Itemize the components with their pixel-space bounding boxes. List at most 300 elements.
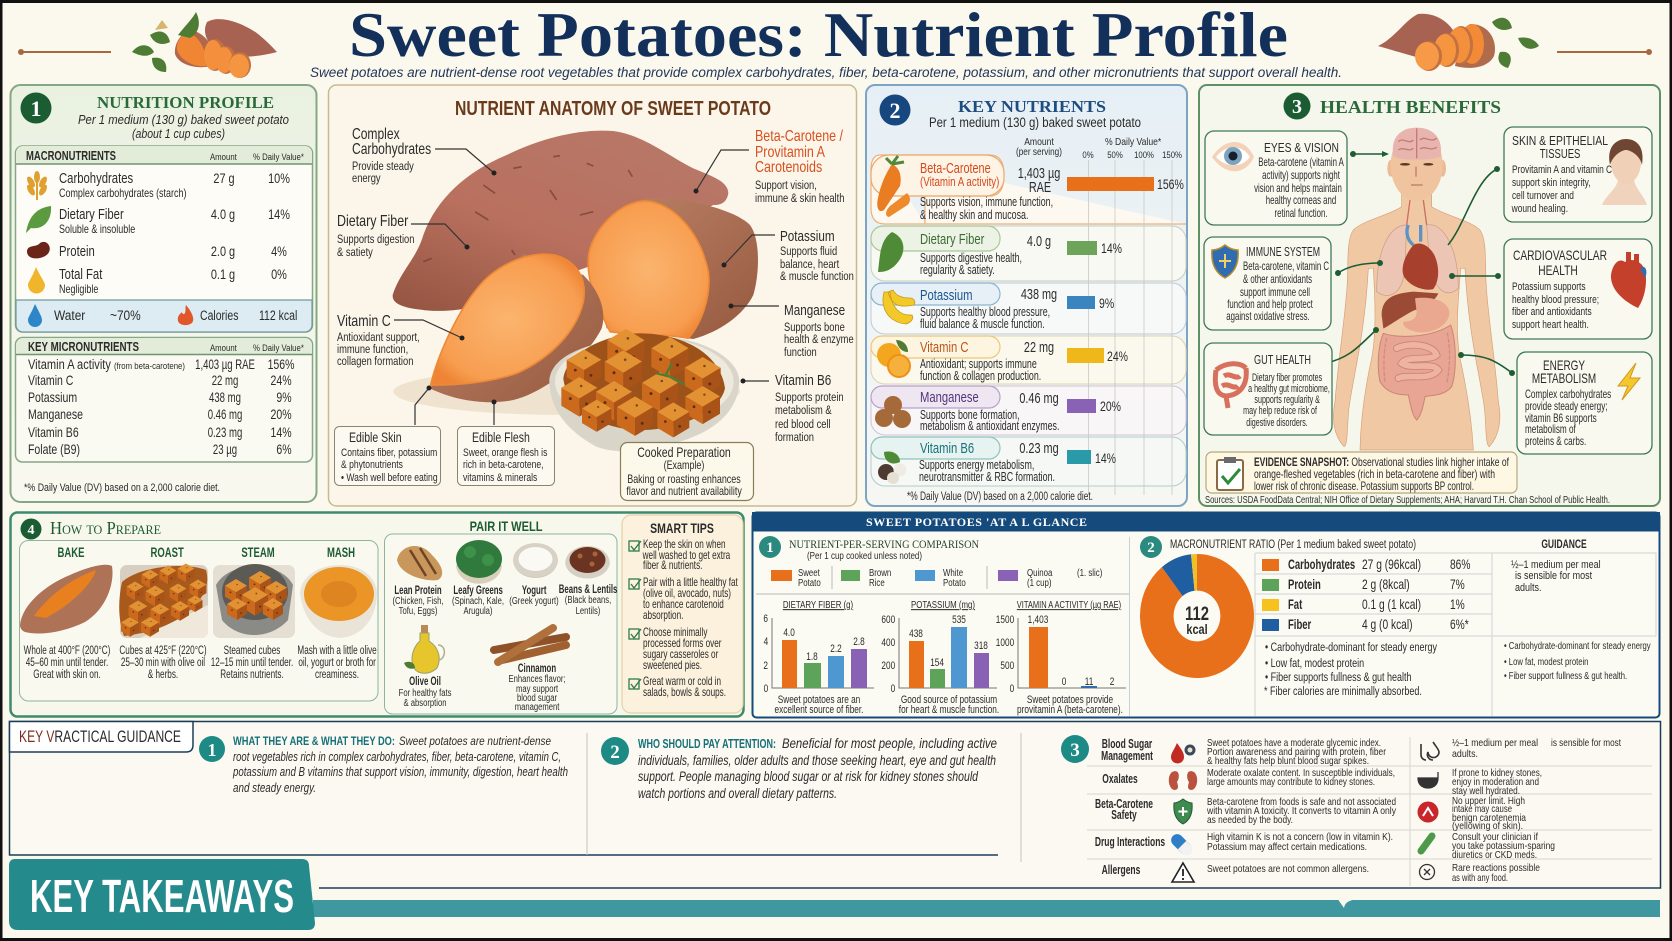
recommendations: you take potassium-sparing bbox=[1452, 840, 1555, 852]
method: steam: STEAM bbox=[241, 544, 275, 561]
callout: vitamin B6: Supports protein bbox=[775, 391, 844, 404]
macronutrient table: 1% bbox=[1450, 596, 1465, 612]
callout: complex carbohydrates bbox=[352, 125, 431, 185]
pair it well: (Spinach, Kale, bbox=[452, 595, 504, 606]
pair it well: blood sugar bbox=[517, 692, 557, 703]
panel: at a glance bbox=[752, 512, 1660, 718]
row: vitamin C bbox=[871, 336, 1186, 384]
callout: edible flesh: Sweet, orange flesh is bbox=[463, 447, 547, 459]
row: vitamin C: function & collagen production. bbox=[920, 370, 1041, 383]
row: dietary fiber: Dietary Fiber bbox=[920, 230, 985, 247]
badge 3 bbox=[1061, 735, 1089, 763]
subtitle: Sweet potatoes are nutrient-dense root vegetables that provide complex carbohydrates, fiber, beta-carotene, potassium, and other micronutrients that support overall health. bbox=[310, 65, 1342, 80]
guidance column: GUIDANCE bbox=[1541, 539, 1587, 551]
bowl of roasted cubes bbox=[549, 329, 739, 451]
callout: complex carbohydrates: Carbohydrates bbox=[352, 140, 431, 157]
chart legend: Potato bbox=[943, 577, 966, 588]
icon: nuts bbox=[875, 396, 911, 428]
icon: olive oil bbox=[404, 625, 444, 673]
row: vitamin C: 22 mg bbox=[1024, 338, 1054, 355]
card: eyes and vision: activity) supports night bbox=[1262, 170, 1340, 183]
who should pay attention: support. People managing blood sugar or at risk for kidney stones should bbox=[638, 769, 978, 784]
macronutrients table: MACRONUTRIENTS bbox=[26, 148, 116, 163]
icon: flame bbox=[178, 305, 193, 325]
bar chart: potassium: 318 bbox=[974, 640, 988, 652]
tip checkboxes bbox=[629, 541, 641, 689]
evidence snapshot bbox=[1206, 452, 1517, 493]
macronutrients table bbox=[16, 146, 312, 332]
smart tips: SMART TIPS bbox=[650, 521, 714, 536]
total fat row bbox=[59, 266, 287, 296]
recommendations: adults. bbox=[1452, 748, 1478, 760]
who should pay attention: Beneficial for most people, including active bbox=[782, 736, 997, 751]
icon: cinnamon bbox=[494, 628, 566, 662]
pair it well: Lentils) bbox=[576, 605, 600, 616]
callout: vitamin B6: formation bbox=[775, 431, 814, 444]
bar chart: percent daily value: 156% bbox=[1157, 177, 1184, 192]
card: skin and epithelial tissues: Provitamin A and vitamin C bbox=[1512, 164, 1612, 176]
micronutrient rows: Potassium bbox=[28, 390, 77, 405]
badge 2: 2 bbox=[610, 742, 620, 763]
row: vitamin B6 bbox=[871, 437, 1186, 486]
card: eyes and vision: retinal function. bbox=[1274, 208, 1328, 221]
micronutrient rows: Vitamin C bbox=[28, 373, 74, 388]
dietary fiber row: Dietary Fiber bbox=[59, 206, 124, 222]
bar chart: potassium: 438 bbox=[909, 628, 923, 640]
column headers and axis: 100% bbox=[1134, 149, 1154, 160]
macronutrients table: % Daily Value* bbox=[253, 151, 304, 162]
what they are: potassium and B vitamins that support vision, immunity, digestion, heart health bbox=[232, 765, 568, 779]
callout: manganese: Manganese bbox=[784, 302, 845, 318]
micronutrient rows: 6% bbox=[276, 442, 292, 457]
row labels: Allergens bbox=[1102, 863, 1140, 878]
badge 1: 1 bbox=[208, 740, 216, 760]
smart tips: well washed to get extra bbox=[642, 550, 731, 562]
descriptions: Portion awareness and pairing with protein, fiber bbox=[1207, 746, 1386, 758]
badge 1 bbox=[759, 536, 781, 558]
descriptions bbox=[1206, 737, 1397, 875]
dietary fiber row: 4.0 g bbox=[211, 207, 235, 222]
micronutrient rows: 438 mg bbox=[209, 390, 241, 405]
row: vitamin B6: 0.23 mg bbox=[1019, 439, 1059, 456]
bar chart: vitamin A: 2 bbox=[1110, 676, 1114, 688]
footnote: *% Daily Value (DV) based on a 2,000 calorie diet. bbox=[907, 491, 1093, 503]
preparation methods bbox=[20, 540, 378, 701]
icon: food mix bbox=[878, 451, 906, 484]
icon: water bowl bbox=[1418, 772, 1438, 788]
total fat row: Total Fat bbox=[59, 266, 103, 282]
recommendations: No upper limit. High bbox=[1452, 795, 1525, 807]
icon: red badge bbox=[1418, 802, 1438, 822]
callout: dietary fiber: Supports digestion bbox=[337, 233, 414, 246]
macronutrient notes: • Carbohydrate-dominant for steady energy bbox=[1265, 641, 1438, 654]
icon: oil drop bbox=[28, 267, 45, 293]
icon: eye bbox=[1212, 142, 1254, 171]
callout: complex carbohydrates: Provide steady bbox=[352, 160, 414, 173]
macronutrient table: Carbohydrates bbox=[1288, 556, 1355, 573]
card: skin and epithelial tissues: support skin integrity, bbox=[1512, 177, 1591, 189]
smart tips: Pair with a little healthy fat bbox=[643, 577, 738, 589]
chart legend: Potato bbox=[798, 577, 821, 588]
what they are bbox=[199, 734, 568, 795]
callout: manganese: Supports bone bbox=[784, 321, 845, 334]
card: immune system: against oxidative stress. bbox=[1226, 311, 1310, 324]
callout: dietary fiber bbox=[337, 213, 414, 259]
smart tips: to enhance carotenoid bbox=[643, 599, 724, 611]
smart tips: fiber & nutrients. bbox=[643, 560, 702, 572]
bar chart: vitamin A: VITAMIN A ACTIVITY (µg RAE) bbox=[1017, 599, 1121, 610]
micronutrient rows: 156% bbox=[268, 357, 295, 372]
icon: face bbox=[1602, 139, 1647, 205]
micronutrients table: KEY MICRONUTRIENTS bbox=[28, 339, 139, 354]
bar chart: vitamin A: 1000 bbox=[996, 637, 1015, 649]
considerations table bbox=[1061, 735, 1652, 886]
row labels: Beta-Carotene bbox=[1095, 797, 1153, 812]
bar chart: dietary fiber: 6 bbox=[763, 613, 768, 625]
callout: cooked preparation: Baking or roasting enhances bbox=[627, 474, 741, 486]
panel: nutrition profile bbox=[10, 85, 316, 502]
badge 2 bbox=[601, 737, 629, 765]
row: potassium bbox=[871, 283, 1186, 334]
recommendations: benign carotenemia bbox=[1452, 812, 1526, 824]
row labels: Blood Sugar bbox=[1102, 737, 1152, 752]
badge 1 bbox=[199, 736, 225, 762]
bar chart: dietary fiber: 1.8 bbox=[806, 651, 818, 663]
column headers and axis: 150% bbox=[1162, 149, 1182, 160]
serving note bbox=[78, 112, 289, 141]
card: skin and epithelial tissues: wound healing. bbox=[1511, 203, 1568, 215]
callout: edible flesh: vitamins & minerals bbox=[463, 472, 537, 484]
method: bake: 45–60 min until tender. bbox=[26, 657, 108, 670]
protein row bbox=[59, 243, 287, 259]
callout: complex carbohydrates: Complex bbox=[352, 125, 400, 142]
smart tips: salads, bowls & soups. bbox=[643, 687, 726, 699]
badge 3: 3 bbox=[1292, 96, 1302, 118]
bar chart: potassium: 200 bbox=[881, 660, 896, 672]
pair it well: (Black beans, bbox=[565, 594, 611, 605]
bar chart: vitamin A bbox=[996, 599, 1126, 716]
guidance tab bbox=[10, 722, 193, 752]
callout: edible skin: & phytonutrients bbox=[341, 459, 403, 471]
bar chart: potassium: 400 bbox=[881, 637, 896, 649]
micronutrient rows: 20% bbox=[270, 407, 292, 422]
row: beta-carotene: 1,403 µg bbox=[1018, 164, 1060, 181]
method: steam: Steamed cubes bbox=[224, 645, 280, 658]
callout: vitamin C: collagen formation bbox=[337, 355, 413, 368]
row: dietary fiber: 4.0 g bbox=[1027, 232, 1051, 249]
callout: vitamin C: immune function, bbox=[337, 343, 408, 356]
row: vitamin B6: Vitamin B6 bbox=[920, 439, 974, 456]
title: Sweet Potatoes: Nutrient Profile bbox=[349, 0, 1288, 70]
card: energy metabolism: proteins & carbs. bbox=[1525, 436, 1586, 448]
smart tips: Great warm or cold in bbox=[643, 676, 721, 688]
bar chart: potassium: 600 bbox=[881, 614, 896, 626]
method: steam: Retains nutrients. bbox=[220, 669, 284, 682]
icon: oranges bbox=[877, 340, 910, 377]
column headers and axis: % Daily Value* bbox=[1105, 136, 1162, 148]
callout: edible flesh bbox=[458, 426, 554, 486]
macronutrient notes bbox=[1264, 641, 1438, 698]
card: cardiovascular health bbox=[1504, 239, 1652, 339]
card: gut health: a healthy gut microbiome, bbox=[1248, 383, 1330, 394]
donut chart: 112 bbox=[1185, 603, 1209, 624]
guidance column: • Low fat, modest protein bbox=[1504, 656, 1588, 667]
column headers and axis bbox=[1016, 136, 1182, 160]
icon: leafy greens bbox=[456, 540, 502, 584]
footnote: *% Daily Value (DV) based on a 2,000 calorie diet. bbox=[24, 482, 220, 494]
pair it well: PAIR IT WELL bbox=[470, 519, 543, 534]
macronutrient table: 6%* bbox=[1450, 616, 1469, 632]
row: beta-carotene: RAE bbox=[1029, 178, 1051, 195]
comparison section: NUTRIENT-PER-SERVING COMPARISON bbox=[789, 537, 979, 551]
icon: leaf bbox=[26, 206, 51, 233]
recommendations: (yellowing of skin). bbox=[1452, 820, 1523, 832]
leader lines bbox=[394, 149, 779, 425]
method: steam bbox=[211, 544, 295, 682]
icon: portion bbox=[1421, 742, 1439, 760]
method: bake: Great with skin on. bbox=[33, 669, 101, 682]
method: steam: 12–15 min until tender. bbox=[211, 657, 293, 670]
bar chart: vitamin A: provitamin A (beta-carotene). bbox=[1017, 704, 1123, 716]
card: gut health: supports regularity & bbox=[1254, 394, 1321, 405]
row labels bbox=[1095, 737, 1165, 878]
guidance tab: KEY VRACTICAL GUIDANCE bbox=[19, 727, 181, 746]
card: immune system: Beta-carotene, vitamin C bbox=[1243, 261, 1329, 274]
method: roast bbox=[119, 544, 208, 682]
macronutrient table: Fiber bbox=[1288, 616, 1312, 633]
pair it well: (Greek yogurt) bbox=[509, 595, 559, 606]
icon: water drop bbox=[28, 304, 42, 327]
badge 2 bbox=[880, 94, 910, 126]
bar chart: potassium: Good source of potassium bbox=[901, 694, 997, 706]
bar chart: vitamin A: 0 bbox=[1010, 683, 1015, 695]
who should pay attention: individuals, families, older adults and those seeking heart, eye and gut health bbox=[638, 753, 996, 768]
recommendations: Rare reactions possible bbox=[1452, 862, 1540, 874]
callout: cooked preparation: Cooked Preparation bbox=[637, 445, 731, 460]
callout: cooked preparation: flavor and nutrient availability bbox=[626, 486, 743, 498]
panel: key nutrients bbox=[866, 85, 1187, 506]
icon: bananas bbox=[883, 290, 915, 324]
card: gut health: GUT HEALTH bbox=[1254, 353, 1311, 367]
card: energy metabolism: ENERGY bbox=[1543, 357, 1585, 373]
donut chart: kcal bbox=[1186, 622, 1208, 637]
what they are: Sweet potatoes are nutrient-dense bbox=[399, 734, 551, 748]
evidence snapshot: EVIDENCE SNAPSHOT: Observational studies link higher intake of bbox=[1254, 455, 1509, 469]
pair it well: Arugula) bbox=[464, 605, 492, 616]
descriptions: High vitamin K is not a concern (low in vitamin K). bbox=[1207, 831, 1393, 843]
comparison section: (Per 1 cup cooked unless noted) bbox=[807, 550, 922, 562]
bar chart: percent daily value: 14% bbox=[1101, 241, 1122, 256]
bar chart: dietary fiber: 4 bbox=[764, 636, 769, 648]
total fat row: 0.1 g bbox=[211, 267, 235, 282]
icon: bean bbox=[27, 242, 50, 258]
card: energy metabolism: Complex carbohydrates bbox=[1525, 389, 1611, 401]
smart tips: absorption. bbox=[643, 610, 683, 622]
callout: manganese bbox=[784, 302, 854, 359]
row: potassium: fluid balance & muscle function. bbox=[920, 318, 1045, 331]
what they are: root vegetables rich in complex carbohydrates, fiber, beta-carotene, vitamin C, bbox=[233, 750, 561, 764]
micronutrient rows: 1,403 µg RAE bbox=[195, 357, 255, 372]
bar chart: potassium: 154 bbox=[930, 657, 944, 669]
card: skin and epithelial tissues bbox=[1504, 127, 1652, 222]
row: manganese: 0.46 mg bbox=[1019, 389, 1059, 406]
guidance column: is sensible for most bbox=[1515, 570, 1592, 582]
card: cardiovascular health: healthy blood pressure; bbox=[1512, 294, 1599, 306]
chart legend: Brown bbox=[869, 567, 891, 578]
pair it well: Leafy Greens bbox=[453, 585, 503, 598]
micronutrient rows: 22 mg bbox=[212, 373, 238, 388]
badge 1: 1 bbox=[766, 540, 774, 556]
serving note: Per 1 medium (130 g) baked sweet potato bbox=[929, 115, 1141, 130]
method: roast: 25–30 min with olive oil bbox=[121, 657, 205, 670]
row: beta-carotene: Supports vision, immune function, bbox=[920, 196, 1053, 209]
method: mash bbox=[297, 544, 377, 682]
micronutrient rows: Vitamin A activity (from beta-carotene) bbox=[28, 357, 185, 372]
guidance column: • Fiber support fullness & gut health. bbox=[1504, 670, 1627, 681]
descriptions: large amounts may contribute to kidney stones. bbox=[1207, 776, 1375, 788]
glance header bbox=[752, 512, 1660, 532]
micronutrient rows: Folate (B9) bbox=[28, 442, 80, 457]
carbohydrates row: 10% bbox=[268, 171, 290, 186]
bar chart: vitamin A: 1,403 bbox=[1028, 614, 1048, 626]
badge 2: 2 bbox=[1147, 540, 1155, 556]
key takeaways banner bbox=[9, 859, 1660, 930]
callout: vitamin B6: red blood cell bbox=[775, 418, 831, 431]
icon: blood sugar bbox=[1171, 743, 1196, 764]
pair it well: (Chicken, Fish, bbox=[392, 595, 444, 606]
callout: potassium: balance, heart bbox=[780, 258, 839, 271]
bar chart: dietary fiber: excellent source of fiber. bbox=[775, 704, 863, 716]
card: immune system bbox=[1204, 237, 1331, 330]
callout: vitamin C: Vitamin C bbox=[337, 313, 391, 330]
comparison section bbox=[756, 536, 1130, 716]
smart tips: sweetened pies. bbox=[643, 660, 702, 672]
callout: beta-carotene bbox=[755, 128, 844, 205]
macronutrient ratio section: MACRONUTRIENT RATIO (Per 1 medium baked sweet potato) bbox=[1170, 539, 1416, 551]
badge 1: 1 bbox=[30, 96, 42, 121]
macronutrient table: 4 g (0 kcal) bbox=[1362, 616, 1413, 632]
row: vitamin C: Vitamin C bbox=[920, 338, 969, 355]
row: vitamin B6: neurotransmitter & RBC formation. bbox=[919, 471, 1055, 484]
bar chart: vitamin A: Sweet potatoes provide bbox=[1027, 694, 1113, 706]
icon: capsule bbox=[1169, 832, 1195, 858]
bar chart: vitamin A: 500 bbox=[1000, 660, 1015, 672]
serving note: (about 1 cup cubes) bbox=[132, 126, 225, 141]
callout: edible flesh: rich in beta-carotene, bbox=[463, 459, 544, 471]
callout: dietary fiber: Dietary Fiber bbox=[337, 213, 409, 230]
descriptions: as needed by the body. bbox=[1207, 814, 1293, 826]
callout: potassium: Supports fluid bbox=[780, 245, 837, 258]
row labels: Safety bbox=[1111, 808, 1137, 823]
row: manganese: Manganese bbox=[920, 388, 979, 405]
what they are: and steady energy. bbox=[233, 781, 316, 795]
card: immune system: & other antioxidants bbox=[1243, 274, 1312, 287]
protein row: 4% bbox=[271, 244, 287, 259]
card: skin and epithelial tissues: TISSUES bbox=[1540, 148, 1581, 161]
micronutrient rows: 0.46 mg bbox=[208, 407, 242, 422]
guidance column: adults. bbox=[1515, 582, 1542, 594]
teal band bbox=[313, 900, 1660, 917]
badge 1 bbox=[20, 92, 52, 124]
bar chart: dietary fiber: DIETARY FIBER (g) bbox=[783, 599, 853, 610]
row: dietary fiber: Supports digestive health, bbox=[920, 252, 1022, 265]
method: mash: Mash with a little olive bbox=[297, 645, 377, 658]
micronutrients table: Amount bbox=[210, 342, 237, 353]
anatomy heading: NUTRIENT ANATOMY OF SWEET POTATO bbox=[455, 98, 771, 120]
takeaways heading: KEY TAKEAWAYS bbox=[30, 870, 294, 922]
column headers and axis: (per serving) bbox=[1016, 146, 1062, 157]
pair it well: & absorption bbox=[403, 697, 447, 708]
row: manganese: metabolism & antioxidant enzymes. bbox=[920, 420, 1059, 433]
row: beta-carotene: (Vitamin A activity) bbox=[920, 176, 1000, 189]
card: cardiovascular health: HEALTH bbox=[1538, 262, 1578, 278]
chart legend bbox=[771, 566, 1102, 589]
card: immune system: support immune cell bbox=[1240, 287, 1310, 300]
panel: nutrient anatomy bbox=[328, 85, 856, 506]
guidance column bbox=[1504, 539, 1651, 681]
water and calories strip: Water bbox=[54, 307, 86, 323]
water and calories strip: 112 kcal bbox=[259, 308, 297, 323]
method: roast: ROAST bbox=[150, 544, 184, 561]
method: bake: Whole at 400°F (200°C) bbox=[24, 645, 110, 658]
badge 2 bbox=[1140, 536, 1162, 558]
icon: crossed circle bbox=[1420, 864, 1434, 880]
icon: carrots bbox=[877, 156, 910, 217]
method: bake bbox=[20, 544, 113, 682]
callout: edible skin: Contains fiber, potassium bbox=[341, 447, 437, 459]
carbohydrates row: 27 g bbox=[213, 171, 235, 186]
recommendations bbox=[1452, 737, 1621, 884]
icon: wheat bbox=[25, 171, 49, 200]
right ornament line bbox=[1557, 49, 1652, 55]
method: roast: & herbs. bbox=[148, 669, 178, 682]
row labels: Oxalates bbox=[1102, 772, 1138, 787]
card: cardiovascular health: support heart health. bbox=[1512, 319, 1589, 331]
callout: beta-carotene: immune & skin health bbox=[755, 192, 844, 205]
icon: intestine bbox=[1215, 364, 1246, 408]
header bbox=[18, 0, 1652, 80]
recommendations: stay well hydrated. bbox=[1452, 785, 1520, 797]
card: energy metabolism: provide steady energy; bbox=[1525, 401, 1608, 413]
heading: HEALTH BENEFITS bbox=[1320, 97, 1501, 117]
protein row: 2.0 g bbox=[211, 244, 235, 259]
callout: vitamin C: Antioxidant support, bbox=[337, 331, 420, 344]
heading: NUTRITION PROFILE bbox=[97, 93, 274, 112]
icon: lightning bolt bbox=[1618, 363, 1640, 400]
row: beta-carotene: Beta-Carotene bbox=[920, 159, 991, 176]
what they are: WHAT THEY ARE & WHAT THEY DO: bbox=[233, 734, 395, 748]
icon: green capsule bbox=[1421, 836, 1432, 851]
row: beta-carotene: & healthy skin and mucosa. bbox=[920, 209, 1028, 222]
micronutrient rows bbox=[28, 357, 295, 457]
card: eyes and vision: Beta-carotene (vitamin A bbox=[1258, 157, 1344, 170]
descriptions: Sweet potatoes are not common allergens. bbox=[1207, 863, 1369, 875]
micronutrient rows: Vitamin B6 bbox=[28, 425, 79, 440]
column headers and axis: Amount bbox=[1024, 136, 1054, 148]
guidance column: • Carbohydrate-dominant for steady energy bbox=[1504, 640, 1651, 651]
smart tips: sugary casseroles or bbox=[643, 649, 719, 661]
row: potassium: Potassium bbox=[920, 286, 972, 303]
bar chart: dietary fiber: 4.0 bbox=[783, 627, 795, 639]
icon: yogurt bbox=[513, 543, 558, 578]
card: eyes and vision: vision and helps maintain bbox=[1254, 183, 1342, 196]
pair it well: Yogurt bbox=[522, 585, 547, 598]
guidance column: ½–1 medium per meal bbox=[1511, 559, 1601, 571]
recommendations: diuretics or CKD meds. bbox=[1452, 849, 1537, 861]
chart legend: Quinoa bbox=[1027, 567, 1053, 578]
body illustration bbox=[1333, 128, 1500, 450]
card: eyes and vision: EYES & VISION bbox=[1264, 140, 1339, 155]
